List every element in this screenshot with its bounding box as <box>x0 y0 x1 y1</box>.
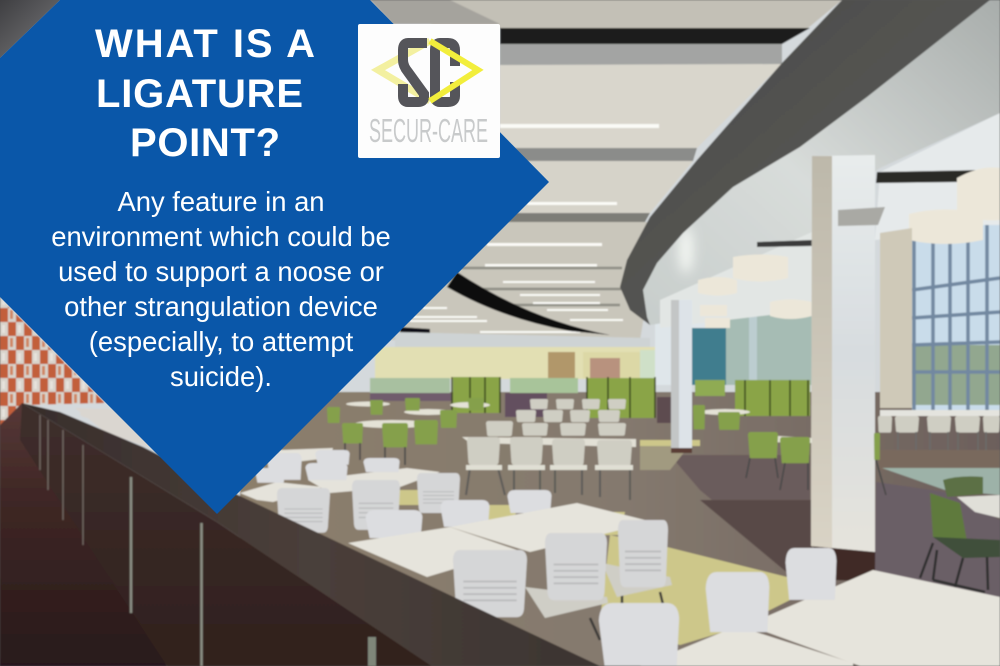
dark curved fascia <box>620 0 990 325</box>
soffit <box>643 0 1000 325</box>
soffit glow <box>778 109 822 127</box>
third cloud edge <box>500 213 650 222</box>
teal and sage wall <box>655 303 812 385</box>
top-left grey corner <box>0 0 60 58</box>
floor <box>240 392 1000 666</box>
dark strip above window <box>876 170 985 183</box>
logo card <box>358 24 500 158</box>
left floor <box>0 403 167 666</box>
definition text: Any feature in an <box>117 186 325 217</box>
logo yellow diamond, bright right half <box>430 41 478 101</box>
ceiling cloud edge <box>500 44 782 65</box>
far right room ceiling <box>875 113 1000 240</box>
green chairs <box>327 398 886 495</box>
ceiling black strip <box>500 28 810 44</box>
railing cap <box>22 403 600 666</box>
dark strip above lamps <box>757 240 812 247</box>
definition text: suicide). <box>170 361 272 392</box>
mid white chairs <box>255 450 552 538</box>
railing wall panels <box>20 403 432 666</box>
definition text <box>51 186 391 392</box>
far wall <box>375 347 655 379</box>
far white chair rows <box>486 399 626 436</box>
mid white tables <box>240 448 440 502</box>
ceiling top panel <box>370 0 842 28</box>
second cloud panel <box>500 161 693 213</box>
left orange checker wall <box>0 298 105 440</box>
ceiling dark curved beam <box>447 272 610 335</box>
partitions <box>370 377 810 423</box>
title: LIGATURE <box>96 72 303 116</box>
foreground white tables <box>348 503 1000 666</box>
right room white chairs <box>878 410 1000 450</box>
pendant lamps <box>698 167 1000 328</box>
far bulkhead <box>395 332 650 350</box>
counter top items <box>75 408 150 448</box>
window wall <box>912 225 1000 415</box>
logo letters SC <box>403 43 455 102</box>
title <box>95 22 315 165</box>
title: WHAT IS A <box>95 22 315 66</box>
title: POINT? <box>130 121 280 165</box>
definition text: environment which could be <box>51 221 391 252</box>
long white table row <box>462 437 636 447</box>
logo yellow diamond, pale left half <box>378 41 430 101</box>
foreground chairs <box>453 520 836 666</box>
row of cream chairs <box>466 437 633 500</box>
definition text: (especially, to attempt <box>89 326 354 357</box>
ceiling light strips <box>410 124 659 333</box>
round tables far <box>346 402 812 443</box>
definition text: used to support a noose or <box>58 256 384 287</box>
ceiling cloud panel <box>500 64 782 148</box>
second cloud edge <box>500 148 697 161</box>
definition text: other strangulation device <box>64 291 378 322</box>
structural columns <box>671 155 912 552</box>
lower soffit fill <box>660 232 812 328</box>
ceiling base <box>380 222 660 340</box>
large green chair and table <box>920 476 1000 592</box>
yellow floor patches <box>395 440 790 645</box>
ceiling seams <box>460 268 628 305</box>
panel: blue diamond <box>0 0 549 514</box>
logo wordmark: SECUR-CARE <box>369 112 488 149</box>
